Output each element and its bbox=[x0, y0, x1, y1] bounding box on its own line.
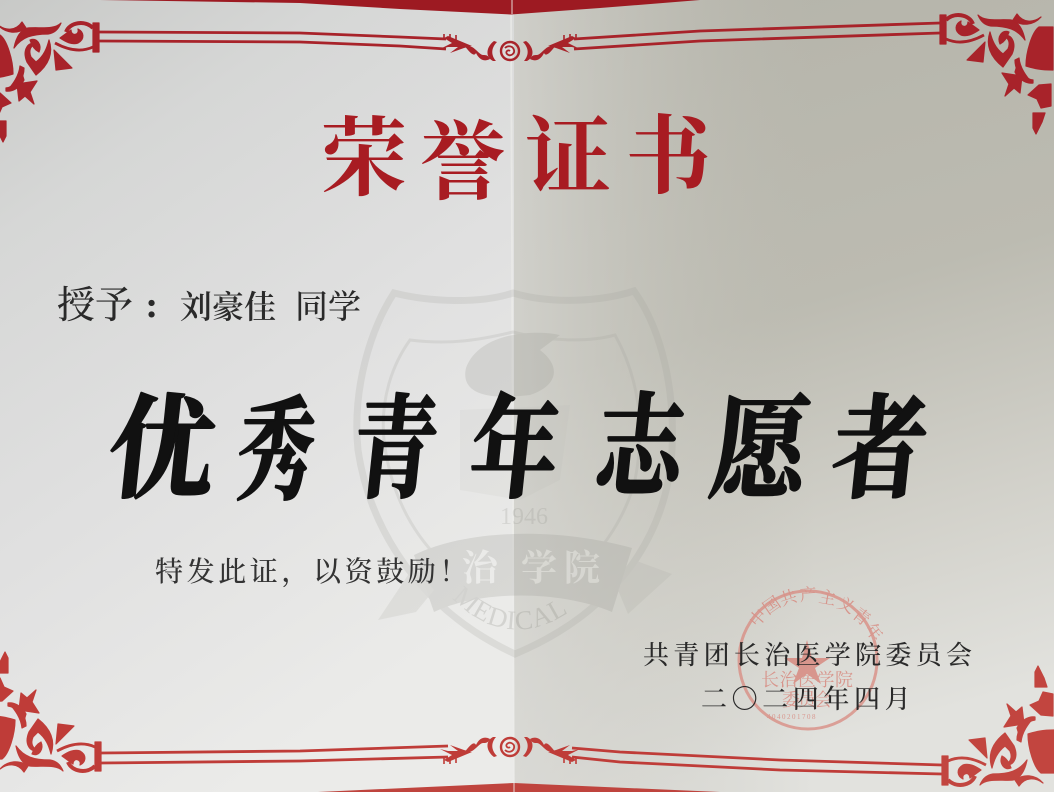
recipient name: 刘豪佳 bbox=[180, 289, 276, 325]
ornament: bottom right corner bbox=[942, 666, 1054, 786]
title: 荣誉证书: 证 bbox=[525, 110, 611, 206]
certificate background: left page bbox=[0, 0, 514, 792]
seal arc text: 主 bbox=[817, 587, 837, 609]
seal arc text: 年 bbox=[861, 619, 887, 645]
seal arc text: 青 bbox=[849, 604, 874, 630]
award name: 优秀青年志愿者 bbox=[102, 387, 933, 514]
ornament: bottom left corner bbox=[0, 652, 101, 772]
award name: 优秀青年志愿者: 志 bbox=[590, 387, 695, 511]
commendation sentence: 特发此证，以资鼓励！ bbox=[155, 556, 471, 588]
award name: 优秀青年志愿者: 者 bbox=[826, 390, 933, 513]
seal arc text: 中 bbox=[746, 605, 771, 631]
award name: 优秀青年志愿者: 秀 bbox=[231, 390, 321, 514]
seal inner text second line: 委员会 bbox=[782, 690, 832, 710]
seal arc text: 共 bbox=[777, 586, 799, 610]
top red band bbox=[100, 0, 700, 14]
watermark: year: 1946 bbox=[500, 504, 548, 530]
seal arc text: 国 bbox=[759, 593, 784, 618]
seal inner text: 长治医学院 bbox=[761, 670, 853, 690]
watermark: MEDICAL arc: MEDICAL bbox=[460, 598, 566, 630]
red seal bbox=[739, 585, 887, 729]
ornament: top centre rosette bbox=[440, 34, 580, 61]
seal star bbox=[784, 640, 830, 684]
title: 荣誉证书: 荣 bbox=[321, 111, 407, 207]
title: 荣誉证书: 誉 bbox=[420, 115, 506, 211]
bottom border double rule bbox=[100, 746, 942, 774]
centre fold crease bbox=[511, 0, 514, 792]
recipient line bbox=[57, 285, 361, 327]
recipient colon: ： bbox=[143, 292, 173, 325]
title: 荣誉证书 bbox=[321, 109, 713, 211]
issue date: 二〇二四年四月 bbox=[701, 685, 915, 714]
certificate background: right page bbox=[514, 0, 1054, 792]
award name: 优秀青年志愿者: 愿 bbox=[704, 389, 819, 512]
award name: 优秀青年志愿者: 优 bbox=[102, 388, 222, 513]
right page shading near fold bbox=[514, 0, 814, 792]
ornament: top right corner bbox=[940, 14, 1053, 134]
seal number: 4040201708 bbox=[767, 713, 817, 721]
top border double rule bbox=[99, 23, 940, 49]
ornament: bottom centre rosette bbox=[440, 737, 580, 764]
bottom red band bbox=[318, 783, 720, 792]
band fold highlight bbox=[512, 0, 514, 792]
watermark: medical college shield bbox=[354, 289, 675, 658]
watermark: college name: 治 学院 bbox=[462, 548, 607, 588]
seal arc text bbox=[746, 585, 887, 645]
ornament: top left corner bbox=[0, 22, 99, 142]
recipient suffix: 同学 bbox=[295, 289, 361, 326]
award name: 优秀青年志愿者: 年 bbox=[464, 388, 565, 512]
seal arc text: 义 bbox=[834, 593, 858, 618]
award name: 优秀青年志愿者: 青 bbox=[347, 389, 443, 513]
issuer: 共青团长治医学院委员会 bbox=[643, 641, 976, 670]
title: 荣誉证书: 书 bbox=[625, 109, 713, 205]
recipient label: 授予 bbox=[57, 285, 133, 327]
seal arc text: 产 bbox=[799, 585, 817, 605]
